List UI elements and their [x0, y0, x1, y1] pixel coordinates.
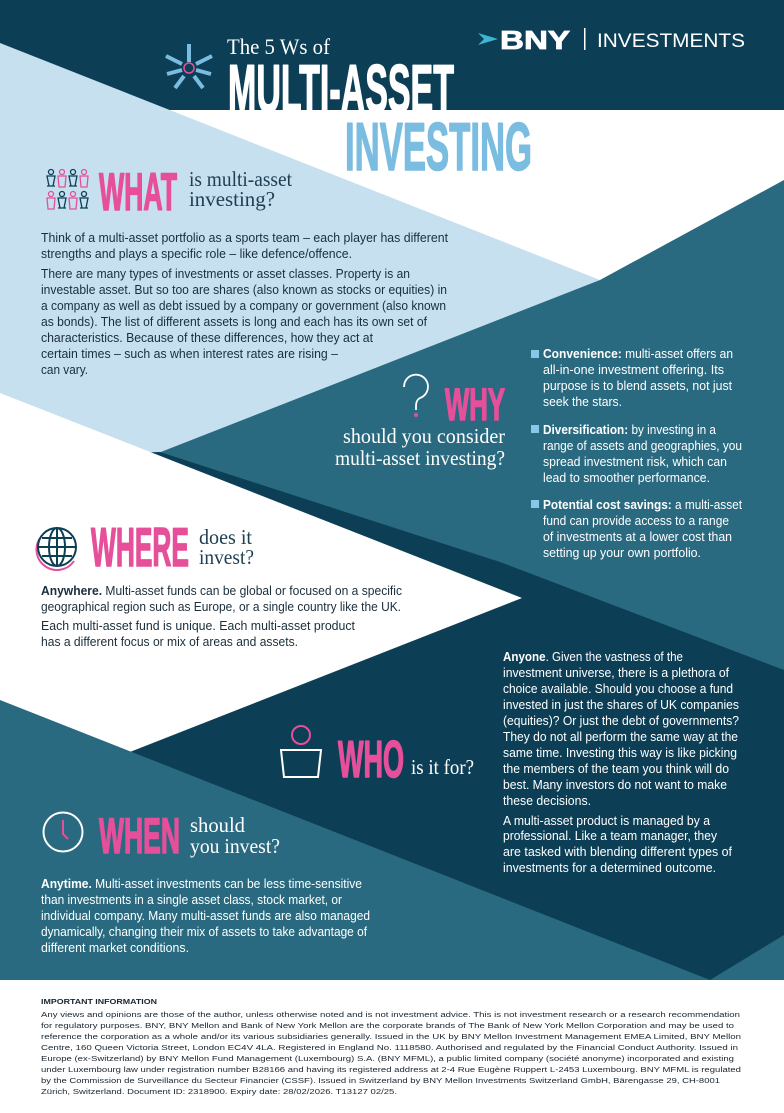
text: why bullets: setting up your own portfolio.	[543, 545, 701, 560]
text: who body: A multi-asset product is managed by a	[503, 813, 711, 828]
text: who body: choice available. Should you choose a fund	[503, 681, 733, 696]
text: when body: individual company. Many multi-asset funds are also managed	[41, 908, 370, 923]
text: who body: investment universe, there is a plethora of	[503, 665, 729, 680]
footer: important information: Zürich, Switzerland. Document ID: 2318900. Expiry date: 28/02/2026. T13127 02/25.	[41, 1087, 397, 1096]
text: why bullets: seek the stars.	[543, 394, 622, 409]
heading: WHY: WHY	[445, 379, 505, 430]
text: why bullets: lead to smoother performance.	[543, 470, 710, 485]
text: what body: certain times – such as when interest rates are rising –	[41, 346, 339, 361]
text: why bullets: purpose is to blend assets, not just	[543, 378, 732, 393]
heading: WHERE: WHERE	[91, 516, 189, 578]
text: why bullets: fund can provide access to a range	[543, 513, 729, 528]
text: why bullets: Diversification: by investing in a	[543, 422, 717, 437]
text: who body: same time. Investing this way is like picking	[503, 745, 737, 760]
footer: important information: reference the corporation as a whole and/or its various subsidiaries generally. Issued in the UK by BNY Mellon Investment Management EMEA Limited, BNY Mellon	[41, 1032, 741, 1041]
heading: WHY: should you consider	[343, 424, 505, 448]
heading: WHEN: WHEN	[99, 808, 180, 864]
text: what body: as bonds). The list of different assets is long and each has its own set of	[41, 314, 427, 329]
footer: important information: by the Commission de Surveillance du Secteur Financier (CSSF). Issued in Switzerland by BNY Mellon Investments Switzerland GmbH, Bärengasse 29, CH-8001	[41, 1076, 720, 1085]
text: where body	[41, 583, 402, 649]
footer: important information: Centre, 160 Queen Victoria Street, London EC4V 4LA. Registered in England No. 1118580. Authorised and regulated by the Financial Conduct Authority. Issued in	[41, 1043, 738, 1052]
text: what body: can vary.	[41, 362, 88, 377]
text: why bullets	[531, 346, 742, 560]
text: why bullets: range of assets and geographies, you	[543, 438, 742, 453]
text: who body: professional. Like a team manager, they	[503, 828, 717, 843]
icon: 5 Ws star logo	[166, 44, 212, 88]
icon: people	[47, 170, 88, 209]
heading: WHEN: should	[190, 813, 245, 837]
footer: important information: for regulatory purposes. BNY, BNY Mellon and Bank of New York Mellon are the corporate brands of The Bank of New York Mellon Corporation and may be used to	[41, 1021, 734, 1030]
footer: important information: Europe (ex-Switzerland) by BNY Mellon Fund Management (Luxembourg) S.A. (BNY MFML), a public limited company (société anonyme) incorporated and existing	[41, 1054, 734, 1063]
text: where body: has a different focus or mix of areas and assets.	[41, 634, 298, 649]
text: when body: Anytime. Multi-asset investments can be less time-sensitive	[41, 876, 362, 891]
icon: globe	[36, 528, 76, 570]
text: why bullets: Convenience: multi-asset offers an	[543, 346, 733, 361]
text: when body: than investments in a single asset class, stock market, or	[41, 892, 343, 907]
heading: WHAT: WHAT	[99, 163, 177, 222]
text: what body: investable asset. But so too are shares (also known as stocks or equities) in	[41, 282, 447, 297]
text: who body: They do not all perform the same way at the	[503, 729, 738, 744]
icon: clock	[44, 812, 82, 852]
logo: BNY Investments	[478, 25, 745, 55]
icon: question mark	[404, 375, 428, 417]
text: where body: geographical region such as Europe, or a single country like the UK.	[41, 599, 401, 614]
heading: WHAT: investing?	[189, 187, 275, 211]
heading: WHY: multi-asset investing?	[335, 446, 505, 470]
heading: WHERE: does it	[199, 525, 252, 549]
heading: WHO: is it for?	[411, 755, 474, 779]
title: INVESTING: INVESTING	[345, 109, 532, 185]
text: why bullets: all-in-one investment offering. Its	[543, 362, 724, 377]
text: who body: Anyone. Given the vastness of the	[503, 649, 683, 664]
text: when body	[41, 876, 370, 955]
footer: important information: under Luxembourg law under registration number B28166 and having its registered address at 2-4 Rue Eugène Ruppert L-2453 Luxembourg. BNY MFML is regulated	[41, 1065, 741, 1074]
heading: WHAT: is multi-asset	[189, 167, 292, 191]
text: who body: the members of the team you think will do	[503, 761, 729, 776]
text: when body: dynamically, changing their mix of assets to take advantage of	[41, 924, 367, 939]
text: where body: Each multi-asset fund is unique. Each multi-asset product	[41, 618, 355, 633]
text: who body: are tasked with blending different types of	[503, 844, 732, 859]
text: who body: (equities)? Or just the debt of governments?	[503, 713, 739, 728]
text: who body: investments for a determined outcome.	[503, 860, 716, 875]
icon: person	[281, 726, 321, 777]
logo: BNY Investments: BNY	[500, 25, 570, 55]
text: why bullets: Potential cost savings: a multi-asset	[543, 497, 742, 512]
logo: BNY Investments: INVESTMENTS	[597, 31, 745, 52]
title: The 5 Ws of: The 5 Ws of	[227, 34, 331, 59]
text: why bullets: of investments at a lower cost than	[543, 529, 732, 544]
footer: important information: IMPORTANT INFORMATION	[41, 997, 157, 1006]
text: what body: characteristics. Because of these differences, how they act at	[41, 330, 373, 345]
footer: important information	[41, 997, 741, 1096]
text: why bullets: spread investment risk, which can	[543, 454, 727, 469]
heading: WHY	[335, 379, 505, 470]
heading: WHEN: you invest?	[190, 834, 280, 858]
text: where body: Anywhere. Multi-asset funds can be global or focused on a specific	[41, 583, 402, 598]
text: what body: strengths and plays a specific role – like defence/offence.	[41, 246, 352, 261]
text: MULTI-ASSET	[228, 51, 454, 127]
heading: WHO: WHO	[338, 731, 404, 789]
text: when body: different market conditions.	[41, 940, 189, 955]
text: what body: a company as well as debt issued by a company or government (also known	[41, 298, 446, 313]
text: who body	[503, 649, 739, 875]
text: what body: There are many types of investments or asset classes. Property is an	[41, 266, 410, 281]
text: what body	[41, 230, 448, 377]
heading: WHERE: invest?	[199, 545, 254, 569]
text: who body: these decisions.	[503, 793, 591, 808]
footer: important information: Any views and opinions are those of the author, unless otherwise noted and is not investment advice. This is not investment research or a research recommendation	[41, 1010, 740, 1019]
text: who body: best. Many investors do not want to make	[503, 777, 727, 792]
text: who body: invested in just the shares of UK companies	[503, 697, 739, 712]
text: what body: Think of a multi-asset portfolio as a sports team – each player has different	[41, 230, 448, 245]
